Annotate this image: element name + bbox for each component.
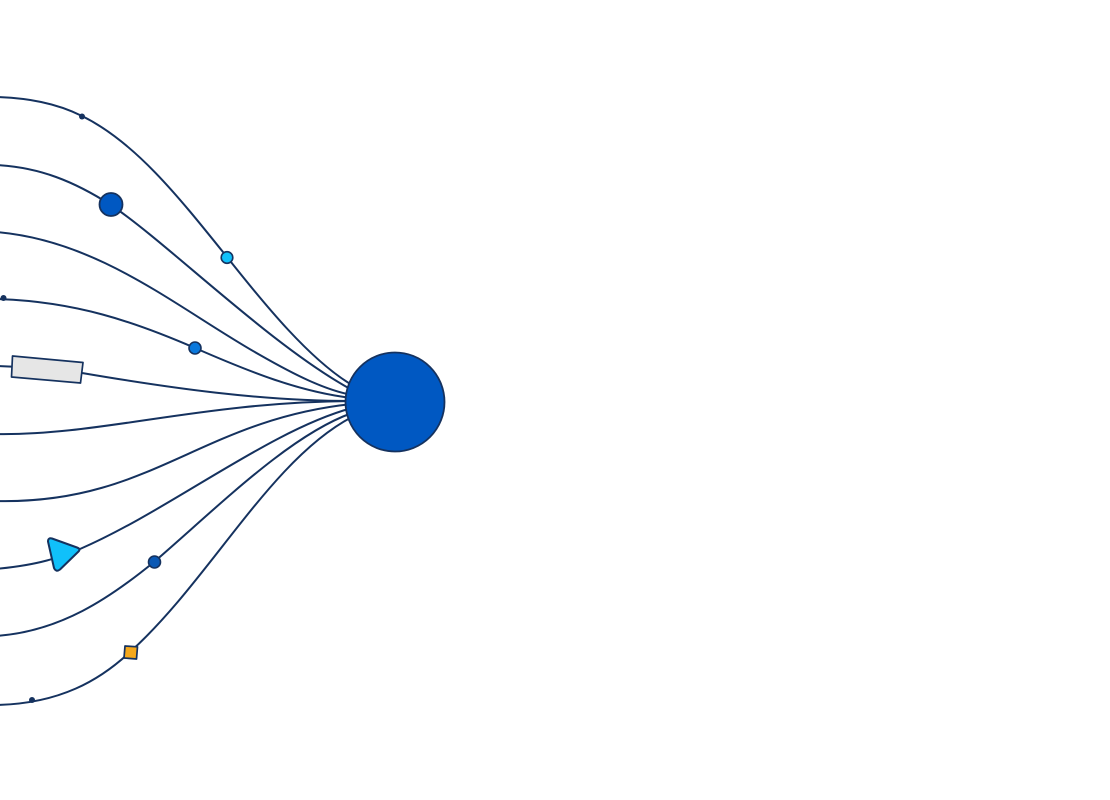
curved links xyxy=(0,97,352,705)
node: cyan triangle xyxy=(48,538,79,571)
central hub circle xyxy=(346,352,444,452)
node: small dot left xyxy=(0,295,6,301)
node: cyan circle xyxy=(221,252,233,263)
node: medium blue circle xyxy=(189,342,201,354)
node: large blue circle xyxy=(100,193,122,216)
node: grey rectangle xyxy=(12,356,83,383)
node: small dot bottom xyxy=(29,697,35,703)
node: orange square xyxy=(124,646,138,659)
node: dark blue circle xyxy=(148,556,160,568)
node: small dot top xyxy=(79,114,85,120)
